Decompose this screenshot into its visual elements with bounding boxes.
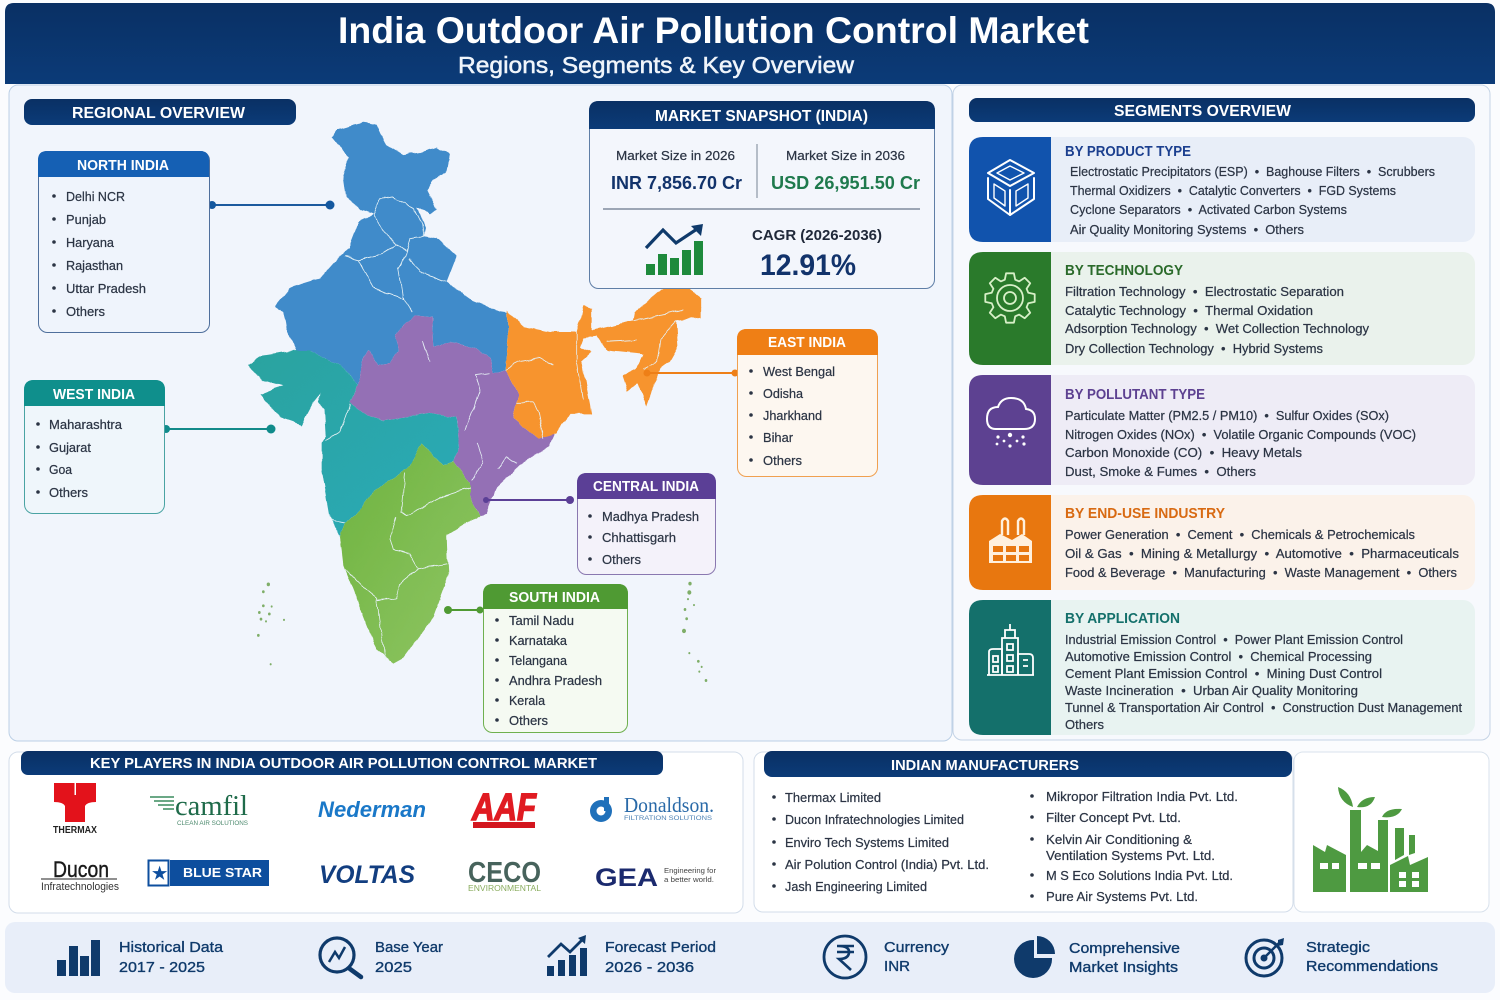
segment: application: Automotive Emission Control • Chemical Processing: [1065, 649, 1372, 664]
segment: end-use industry: BY END-USE INDUSTRY: [1065, 506, 1225, 522]
stat: CAGR: [752, 228, 882, 282]
list: manufacturers right column: Kelvin Air Conditioning &: [1046, 832, 1192, 847]
footer item: strategic recommendations: [1246, 938, 1438, 976]
icon: cloud: [987, 398, 1035, 448]
panel: key players: [9, 751, 743, 913]
card: central india: Others: [602, 552, 641, 567]
connector: west: [162, 424, 276, 434]
footer item: market insights: Market Insights: [1069, 959, 1178, 976]
panel: market snapshot: [589, 101, 935, 288]
card: east india: Jharkhand: [763, 408, 822, 423]
heading: Indian manufacturers: INDIAN MANUFACTURERS: [891, 757, 1079, 774]
segment: application: Tunnel & Transportation Air Control • Construction Dust Management: [1065, 700, 1462, 715]
card: central india: CENTRAL INDIA: [593, 479, 699, 495]
heading: Indian manufacturers: [764, 751, 1292, 777]
card: west india: Goa: [49, 462, 73, 477]
stat: market size 2026: [611, 148, 742, 193]
card: north india: Punjab: [66, 212, 106, 227]
icon: city buildings: [987, 624, 1034, 675]
logo: Camfil: CLEAN AIR SOLUTIONS: [177, 821, 248, 827]
card: south india: Tamil Nadu: [509, 613, 574, 628]
segment: technology: [969, 252, 1475, 365]
list: manufacturers left column: Jash Engineering Limited: [785, 879, 927, 894]
card: north india: Delhi NCR: [66, 189, 125, 204]
connector: south: [444, 606, 484, 614]
footer item: forecast period: Forecast Period: [605, 939, 716, 956]
segment: technology: Filtration Technology • Electrostatic Separation: [1065, 284, 1344, 299]
footer strip: [5, 922, 1495, 993]
segment: product type: Thermal Oxidizers • Catalytic Converters • FGD Systems: [1070, 183, 1396, 198]
logo: Thermax: THERMAX: [53, 825, 97, 836]
panel: green factory: [1294, 752, 1489, 912]
segment: application: Others: [1065, 717, 1104, 732]
stat: CAGR: 12.91%: [760, 249, 856, 282]
logo: CECO: ENVIRONMENTAL: [468, 884, 542, 893]
logo: Thermax: [53, 783, 97, 836]
list: manufacturers left column: Enviro Tech Systems Limited: [785, 835, 949, 850]
logo: GEA: [595, 864, 717, 892]
card: west india: WEST INDIA: [53, 387, 136, 403]
segment: product type: BY PRODUCT TYPE: [1065, 144, 1191, 160]
header banner: [5, 3, 1495, 84]
panel: market snapshot: MARKET SNAPSHOT (INDIA): [655, 108, 868, 125]
icon: cube: [988, 160, 1034, 215]
stat: market size 2026: INR 7,856.70 Cr: [611, 172, 742, 193]
segment: application: BY APPLICATION: [1065, 611, 1180, 627]
title: India Outdoor Air Pollution Control Market: [338, 10, 1089, 51]
stat: market size 2026: Market Size in 2026: [616, 148, 735, 163]
logo: Ducon: [41, 857, 119, 893]
card: west india: Others: [49, 485, 88, 500]
segment: application: Cement Plant Emission Control • Mining Dust Control: [1065, 666, 1382, 681]
segment: end-use industry: Power Generation • Cement • Chemicals & Petrochemicals: [1065, 527, 1415, 542]
connector: central: [483, 496, 574, 504]
logo: Donaldson: [590, 793, 714, 822]
card: south india: Andhra Pradesh: [509, 673, 602, 688]
subtitle: Regions, Segments & Key Overview: [458, 52, 854, 78]
logo: Camfil: camfil: [175, 790, 248, 822]
logo: GEA: Engineering for: [664, 866, 717, 875]
heading: segments overview: [969, 98, 1475, 122]
segment: pollutant type: Nitrogen Oxides (NOx) • Volatile Organic Compounds (VOC): [1065, 427, 1416, 442]
logo: Voltas: VOLTAS: [319, 861, 415, 889]
footer item: strategic recommendations: Recommendations: [1306, 958, 1438, 975]
segment: end-use industry: Food & Beverage • Manufacturing • Waste Management • Others: [1065, 565, 1457, 580]
map: west region: [247, 350, 460, 537]
footer item: market insights: [1014, 936, 1180, 978]
map: south region: [340, 443, 480, 663]
segment: pollutant type: Particulate Matter (PM2.5 / PM10) • Sulfur Oxides (SOx): [1065, 408, 1389, 423]
logo: AAF: AAF: [471, 787, 537, 829]
segment: product type: Cyclone Separators • Activated Carbon Systems: [1070, 202, 1347, 217]
logo: Nederman: Nederman: [318, 797, 426, 822]
card: north india: NORTH INDIA: [77, 158, 169, 174]
stat: CAGR: CAGR (2026-2036): [752, 228, 882, 244]
card: west india: Maharashtra: [49, 417, 123, 432]
stat: market size 2036: Market Size in 2036: [786, 148, 905, 163]
map: islands: [257, 582, 707, 682]
segment: technology: BY TECHNOLOGY: [1065, 263, 1183, 279]
segment: end-use industry: [969, 495, 1475, 590]
segment: product type: Electrostatic Precipitators (ESP) • Baghouse Filters • Scrubbers: [1070, 164, 1435, 179]
card: west india: Gujarat: [49, 440, 91, 455]
panel: segments overview: [953, 85, 1490, 740]
footer item: currency: INR: [884, 958, 910, 975]
segment: pollutant type: [969, 375, 1475, 485]
footer item: forecast period: 2026 - 2036: [605, 959, 694, 976]
connector: north: [208, 200, 334, 210]
segment: end-use industry: Oil & Gas • Mining & Metallurgy • Automotive • Pharmaceuticals: [1065, 546, 1459, 561]
footer item: base year: 2025: [375, 959, 412, 976]
card: north india: Uttar Pradesh: [66, 281, 146, 296]
connector: east: [644, 370, 738, 376]
segment: application: Waste Incineration • Urban Air Quality Monitoring: [1065, 683, 1358, 698]
logo: Ducon: Ducon: [53, 857, 109, 882]
card: central india: [577, 473, 716, 574]
panel: Indian manufacturers: [754, 751, 1293, 912]
list: manufacturers right column: Pure Air Systems Pvt. Ltd.: [1046, 889, 1198, 904]
map of India: [247, 122, 707, 682]
segment: pollutant type: Dust, Smoke & Fumes • Others: [1065, 464, 1256, 479]
card: east india: West Bengal: [763, 364, 835, 379]
logo: GEA: GEA: [595, 864, 658, 892]
card: north india: Others: [66, 304, 105, 319]
card: south india: Others: [509, 713, 548, 728]
card: east india: Others: [763, 453, 802, 468]
icon: growth chart: [646, 224, 703, 275]
segment: product type: [969, 137, 1475, 242]
footer item: historical data: [57, 939, 224, 976]
list: manufacturers right column: Ventilation Systems Pvt. Ltd.: [1046, 848, 1215, 863]
footer item: currency: [824, 936, 950, 978]
card: north india: [38, 151, 210, 332]
heading: regional overview: REGIONAL OVERVIEW: [72, 105, 246, 122]
map: north region: [275, 122, 508, 384]
list: manufacturers left column: Ducon Infratechnologies Limited: [785, 812, 964, 827]
stat: market size 2036: [771, 148, 920, 193]
card: south india: Telangana: [509, 653, 568, 668]
list: manufacturers right column: Mikropor Filtration India Pvt. Ltd.: [1046, 789, 1238, 804]
footer item: base year: Base Year: [375, 939, 443, 956]
list: manufacturers left column: Thermax Limited: [785, 790, 881, 805]
logo: Donaldson: FILTRATION SOLUTIONS: [624, 815, 713, 822]
list: manufacturers right column: M S Eco Solutions India Pvt. Ltd.: [1046, 868, 1233, 883]
logo: Blue Star: BLUE STAR: [183, 865, 263, 880]
logo: Blue Star: [148, 860, 269, 886]
list: manufacturers right column: [1030, 789, 1238, 904]
card: south india: SOUTH INDIA: [509, 590, 601, 606]
footer item: market insights: Comprehensive: [1069, 940, 1180, 957]
card: west india: [24, 380, 165, 514]
map: central region: [350, 315, 555, 515]
segment: technology: Dry Collection Technology • Hybrid Systems: [1065, 341, 1323, 356]
logo: Camfil: [150, 790, 248, 827]
icon: green factory: [1313, 787, 1428, 892]
heading: key players: KEY PLAYERS IN INDIA OUTDOOR AIR POLLUTION CONTROL MARKET: [90, 755, 597, 772]
heading: segments overview: SEGMENTS OVERVIEW: [1114, 103, 1292, 120]
card: central india: Madhya Pradesh: [602, 509, 699, 524]
card: central india: Chhattisgarh: [602, 530, 676, 545]
heading: key players: [21, 751, 663, 775]
card: east india: [737, 329, 878, 476]
card: east india: EAST INDIA: [768, 335, 847, 351]
heading: regional overview: [24, 99, 296, 125]
footer item: forecast period: [547, 935, 716, 976]
list: manufacturers left column: [772, 790, 989, 894]
segment: technology: Adsorption Technology • Wet Collection Technology: [1065, 321, 1369, 336]
stat: market size 2036: USD 26,951.50 Cr: [771, 172, 920, 193]
logo: GEA: a better world.: [664, 875, 714, 884]
segment: pollutant type: Carbon Monoxide (CO) • Heavy Metals: [1065, 445, 1303, 460]
segment: technology: Catalytic Technology • Thermal Oxidation: [1065, 303, 1313, 318]
card: east india: Bihar: [763, 430, 794, 445]
card: north india: Rajasthan: [66, 258, 123, 273]
map: east region: [505, 288, 702, 439]
icon: factory: [989, 518, 1032, 563]
footer item: currency: Currency: [884, 939, 950, 956]
segment: application: [969, 600, 1475, 735]
icon: gear: [985, 273, 1035, 323]
panel: regional overview: [9, 85, 952, 741]
logo: CECO: CECO: [468, 857, 541, 889]
card: south india: Kerala: [509, 693, 546, 708]
footer item: base year: [320, 938, 443, 977]
logo: Donaldson: Donaldson.: [624, 793, 714, 817]
card: south india: Karnataka: [509, 633, 568, 648]
card: north india: Haryana: [66, 235, 115, 250]
card: south india: [483, 584, 628, 732]
segment: pollutant type: BY POLLUTANT TYPE: [1065, 387, 1205, 403]
footer item: historical data: Historical Data: [119, 939, 224, 956]
footer item: strategic recommendations: Strategic: [1306, 939, 1371, 956]
list: manufacturers left column: Air Polution Control (India) Pvt. Ltd.: [785, 857, 989, 872]
footer item: historical data: 2017 - 2025: [119, 959, 205, 976]
segment: product type: Air Quality Monitoring Systems • Others: [1070, 222, 1304, 237]
logo: Blue Star: ★: [152, 864, 168, 883]
logo: Ducon: Infratechnologies: [41, 881, 119, 893]
card: east india: Odisha: [763, 386, 804, 401]
list: manufacturers right column: Filter Concept Pvt. Ltd.: [1046, 810, 1181, 825]
segment: application: Industrial Emission Control • Power Plant Emission Control: [1065, 632, 1403, 647]
